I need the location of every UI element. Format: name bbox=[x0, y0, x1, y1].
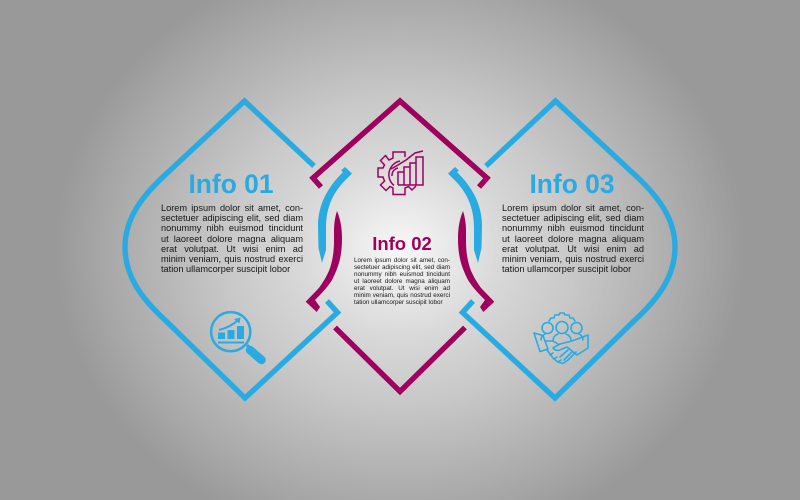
icon: gear with rising bars bbox=[377, 150, 424, 196]
crimson top outline: Info 02 bbox=[309, 98, 491, 189]
text block: Info 02: tation ullamcorper suscipit lobor bbox=[354, 299, 443, 306]
text block: Info 02: ut laoreet dolore magna aliquam bbox=[354, 278, 450, 285]
icon: team and handshake bbox=[533, 312, 589, 364]
right arcs bbox=[448, 167, 494, 312]
text block: Info 02: Lorem ipsum dolor sit amet, con- bbox=[354, 257, 450, 264]
text block: Info 03: Lorem ipsum dolor sit amet, con- bbox=[502, 203, 644, 213]
text block: Info 01: minim veniam, quis nostrud exerci bbox=[161, 254, 303, 264]
text block: Info 01 bbox=[161, 203, 303, 274]
text block: Info 03: tation ullamcorper suscipit lobor bbox=[502, 264, 631, 274]
text block: Info 01: Lorem ipsum dolor sit amet, con- bbox=[161, 203, 303, 213]
crimson bottom chevron: Info 02 bbox=[333, 326, 467, 396]
text block: Info 01: erat volutpat. Ut wisi enim ad bbox=[161, 244, 303, 254]
left arcs bbox=[306, 167, 352, 312]
panel: Info 03 bbox=[458, 97, 678, 402]
text block: Info 01: tation ullamcorper suscipit lobor bbox=[161, 264, 290, 274]
text block: Info 02 bbox=[354, 257, 450, 306]
icon: magnifier over bar chart bbox=[210, 310, 266, 364]
blue outline: Info 03 bbox=[458, 97, 678, 402]
panel: Info 02 bbox=[306, 98, 494, 396]
text block: Info 03: sectetuer adipiscing elit, sed diam bbox=[502, 213, 644, 223]
blue outline: Info 01 bbox=[122, 97, 342, 402]
panel: Info 01 bbox=[122, 97, 342, 402]
text block: Info 03: ut laoreet dolore magna aliquam bbox=[502, 234, 644, 244]
text block: Info 02: sectetuer adipiscing elit, sed diam bbox=[354, 264, 450, 271]
text block: Info 03: minim veniam, quis nostrud exerci bbox=[502, 254, 644, 264]
heading: Info 01: Info 01 bbox=[188, 169, 274, 199]
text block: Info 02: erat volutpat. Ut wisi enim ad bbox=[354, 285, 450, 292]
heading: Info 02: Info 02 bbox=[372, 233, 432, 254]
text block: Info 03: nonummy nibh euismod tincidunt bbox=[502, 223, 644, 233]
text block: Info 03: erat volutpat. Ut wisi enim ad bbox=[502, 244, 644, 254]
text block: Info 01: ut laoreet dolore magna aliquam bbox=[161, 234, 303, 244]
text block: Info 02: nonummy nibh euismod tincidunt bbox=[354, 271, 450, 278]
text block: Info 02: minim veniam, quis nostrud exerci bbox=[354, 292, 450, 299]
text block: Info 01: nonummy nibh euismod tincidunt bbox=[161, 223, 303, 233]
text block: Info 03 bbox=[502, 203, 644, 274]
heading: Info 03: Info 03 bbox=[529, 169, 615, 199]
text block: Info 01: sectetuer adipiscing elit, sed diam bbox=[161, 213, 303, 223]
